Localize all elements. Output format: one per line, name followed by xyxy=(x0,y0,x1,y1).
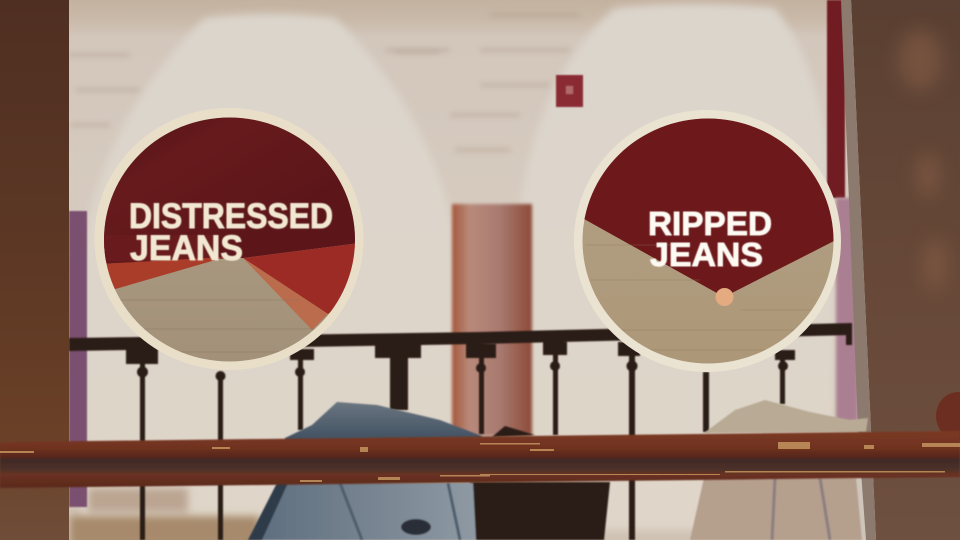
sign label: JEANS xyxy=(650,236,763,273)
value dot xyxy=(716,288,734,306)
left pillar xyxy=(0,0,69,540)
folded denim jacket xyxy=(285,402,482,442)
left arch xyxy=(82,14,460,530)
wooden handrail xyxy=(0,431,960,488)
floor and shelves at bottom xyxy=(70,488,260,540)
brick smudges xyxy=(68,15,580,150)
iron railing xyxy=(69,323,852,540)
central column xyxy=(452,204,532,436)
folded beige cloth xyxy=(704,400,868,433)
sign label xyxy=(648,205,772,273)
clothes on rail xyxy=(285,400,868,442)
pie wedges xyxy=(100,110,360,370)
dark cloth xyxy=(492,426,535,437)
clothes below rail xyxy=(248,478,862,540)
sign rim xyxy=(574,110,841,372)
sign label: RIPPED xyxy=(648,205,772,242)
right pillar xyxy=(841,0,960,540)
pink strip right xyxy=(836,198,858,422)
beige garment xyxy=(690,478,862,540)
sign: distressed jeans xyxy=(94,108,364,370)
sign label: DISTRESSED xyxy=(129,197,333,236)
paint chips xyxy=(0,442,960,482)
jeans xyxy=(248,483,476,540)
purple strip left xyxy=(69,211,87,507)
right arch xyxy=(518,4,834,530)
pillar edge strip xyxy=(841,0,876,540)
pie wedges xyxy=(582,118,834,364)
dark garment xyxy=(470,482,610,540)
round bracket on pillar xyxy=(936,392,960,440)
sign rim xyxy=(94,108,364,370)
red exit sign xyxy=(556,75,583,107)
sign: ripped jeans xyxy=(574,110,845,372)
sign label: JEANS xyxy=(130,229,243,268)
rust patches xyxy=(898,30,947,291)
sign label xyxy=(129,197,333,268)
red strip right xyxy=(827,0,845,198)
